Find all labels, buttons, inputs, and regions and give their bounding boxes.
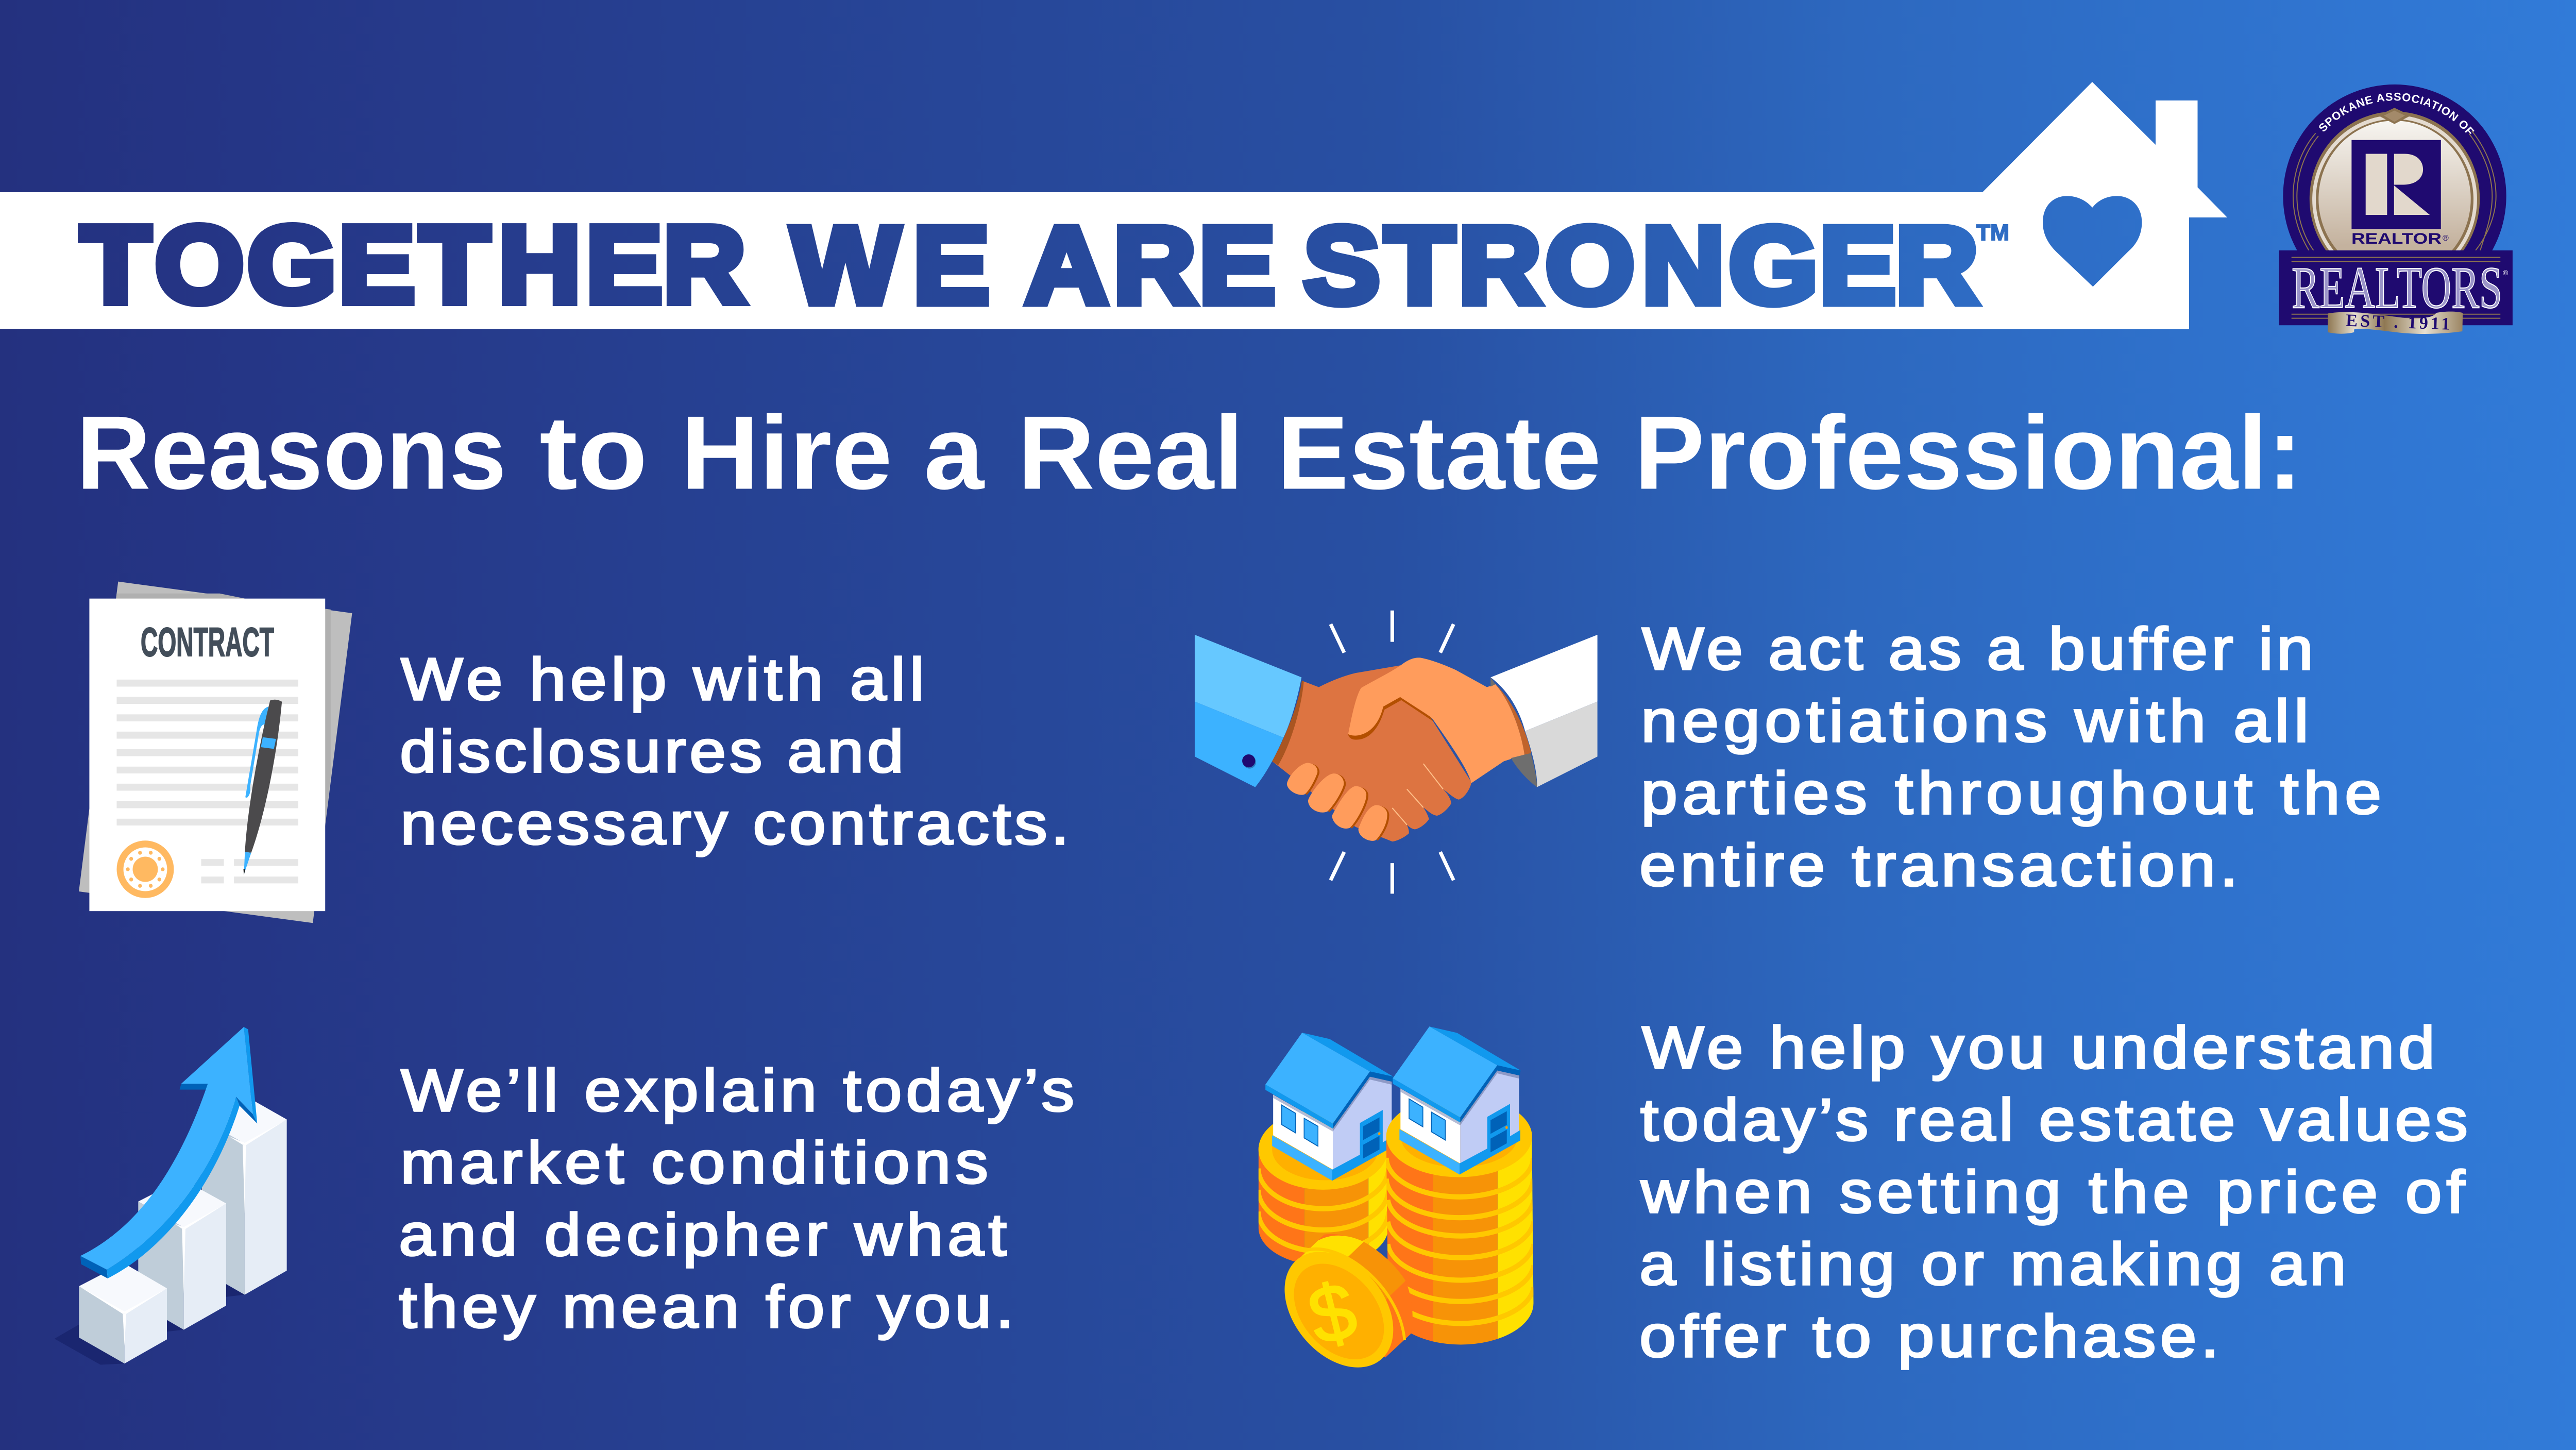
heading: a xyxy=(924,395,985,511)
text: buffer in negotiations: parties throughout the xyxy=(1641,760,2381,827)
heading: Reasons xyxy=(76,395,506,511)
icon: handshake xyxy=(1195,611,1598,893)
text: buffer in negotiations: We act as a buffer in xyxy=(1642,615,2313,682)
logo: Spokane Association of Realtors: REALTOR xyxy=(2351,230,2442,247)
text: buffer in negotiations: negotiations with all xyxy=(1641,687,2309,754)
icon: rising bar chart with arrow xyxy=(55,1027,287,1364)
panel: real estate values xyxy=(1257,1014,2468,1391)
text: disclosures xyxy=(400,646,1069,857)
title: STRONGER xyxy=(1303,205,1978,327)
text: real estate values: a listing or making an xyxy=(1639,1230,2346,1297)
text: real estate values: offer to purchase. xyxy=(1639,1303,2219,1370)
text: buffer in negotiations xyxy=(1639,615,2381,899)
text: market conditions: market conditions xyxy=(400,1129,988,1196)
title xyxy=(80,204,2009,327)
text: buffer in negotiations: entire transaction. xyxy=(1639,832,2238,899)
panel: negotiations xyxy=(1195,611,2381,899)
text: disclosures: We help with all xyxy=(401,646,924,713)
heading: to xyxy=(539,395,648,511)
text: disclosures: disclosures and xyxy=(400,718,904,785)
text: market conditions: We’ll explain today’s xyxy=(401,1057,1074,1124)
text: real estate values: when setting the price of xyxy=(1640,1158,2465,1225)
logo: Spokane Association of Realtors: EST . 1911 xyxy=(2346,311,2450,334)
text: market conditions: they mean for you. xyxy=(399,1273,1014,1340)
heading: Estate xyxy=(1277,395,1601,511)
panel: market conditions xyxy=(55,1027,1074,1364)
panel: contracts xyxy=(79,582,1069,923)
heading xyxy=(76,395,2302,511)
heading: Real xyxy=(1018,395,1244,511)
text: disclosures: necessary contracts. xyxy=(400,790,1069,857)
logo: Spokane Association of Realtors xyxy=(2279,85,2513,334)
heading: Professional: xyxy=(1634,395,2302,511)
title: TM xyxy=(1976,220,2009,245)
text: real estate values xyxy=(1639,1014,2468,1370)
logo: Spokane Association of Realtors: SPOKANE ASSOCIATION OF xyxy=(2319,93,2475,134)
text: real estate values: We help you understand xyxy=(1642,1014,2435,1081)
title: ARE xyxy=(1025,205,1276,327)
text: real estate values: today’s real estate values xyxy=(1640,1086,2468,1153)
icon: houses on coin stacks xyxy=(1257,1026,1534,1391)
text: market conditions: and decipher what xyxy=(399,1201,1007,1268)
header banner with house xyxy=(0,82,2227,329)
title: WE xyxy=(791,205,990,327)
icon: contract: CONTRACT xyxy=(141,619,274,665)
text: market conditions xyxy=(399,1057,1074,1340)
logo: Spokane Association of Realtors: ® xyxy=(2503,268,2509,277)
logo: Spokane Association of Realtors: ® xyxy=(2443,234,2449,243)
icon: contract xyxy=(79,582,352,923)
heading: Hire xyxy=(681,395,892,511)
icon: houses on coin stacks: $ xyxy=(1300,1264,1365,1362)
title: TOGETHER xyxy=(80,204,746,326)
white house-shaped band xyxy=(0,82,2227,329)
icon: heart xyxy=(2043,196,2142,286)
